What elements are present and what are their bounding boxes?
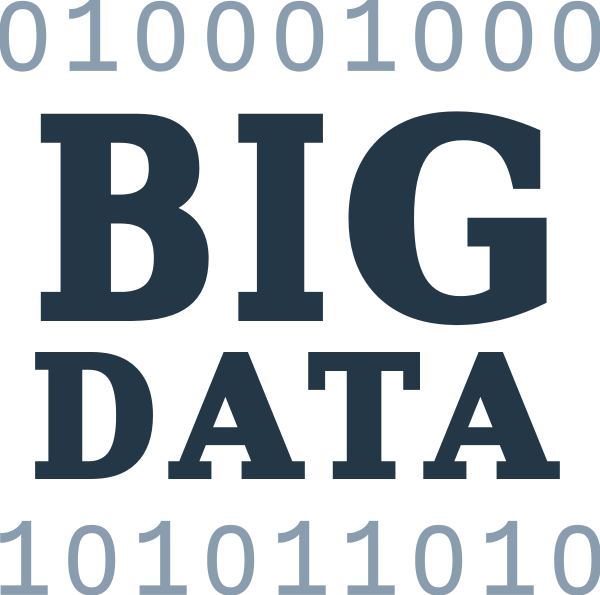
title word: BIG: G bbox=[344, 67, 560, 378]
title word: DATA: A bbox=[172, 323, 301, 514]
binary row: top bbox=[0, 0, 600, 103]
binary row: bottom bbox=[0, 502, 600, 595]
title word: DATA bbox=[32, 323, 556, 514]
title word: DATA: D bbox=[32, 323, 155, 514]
title word: BIG bbox=[36, 64, 560, 378]
title word: DATA: T bbox=[310, 323, 418, 514]
title word: BIG: B bbox=[36, 64, 215, 377]
title word: DATA: A bbox=[427, 323, 556, 514]
title word: BIG: I bbox=[234, 65, 327, 378]
